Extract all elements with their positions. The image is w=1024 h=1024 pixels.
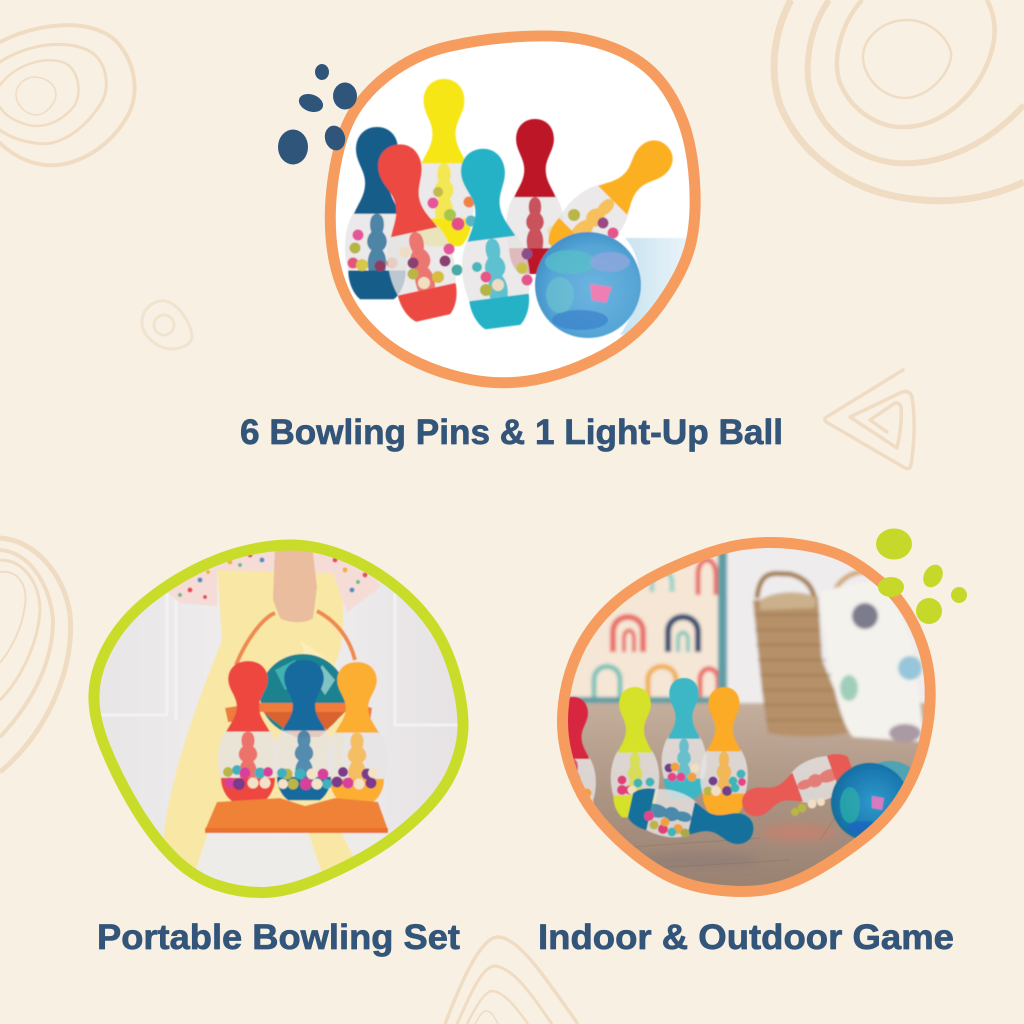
light-up ball: [535, 232, 641, 338]
ball: [260, 654, 346, 736]
coral pin: [377, 144, 463, 322]
decorative contour: left middle: [0, 538, 71, 772]
decorative contour: triangle: [825, 370, 914, 469]
handle: [236, 611, 355, 665]
basket: [753, 592, 852, 736]
floor reflections: [640, 825, 836, 868]
heading: indoor outdoor: Indoor & Outdoor Game: [538, 918, 954, 957]
fallen blue pin: [627, 788, 754, 845]
orange pin: [327, 662, 387, 802]
photo 2: portable bowling set: [90, 540, 470, 900]
ball: [830, 760, 910, 838]
orange pin: [548, 140, 674, 247]
decorative contour: small circle: [142, 301, 192, 349]
rainbows: [594, 560, 718, 697]
upper tray: [225, 703, 372, 737]
wall: [724, 553, 862, 703]
fallen coral pin: [742, 754, 852, 817]
floral blouse: [165, 548, 380, 612]
blue pin: [274, 660, 334, 800]
motion trail: [620, 238, 686, 336]
trousers: [163, 565, 355, 877]
red pin: [568, 696, 596, 803]
teal frame: [555, 550, 727, 705]
carrier tray: [205, 798, 388, 833]
decorative contour: top right: [774, 0, 1024, 201]
wallpaper: [570, 555, 720, 700]
photo 3: indoor and outdoor game: [550, 540, 942, 898]
yellow pin: [413, 79, 476, 246]
red pin: [218, 661, 278, 801]
lime pin: [611, 687, 659, 817]
decorative contour: bottom: [445, 937, 578, 1024]
heading: pins and ball: 6 Bowling Pins & 1 Light-Up Ball: [240, 413, 783, 452]
beads: [223, 765, 378, 790]
decorative contour: top left: [0, 25, 135, 165]
icon: green blobs: [876, 528, 967, 624]
teal pin: [662, 678, 706, 799]
arm: [273, 545, 317, 622]
blanket: [832, 585, 924, 744]
blue pin: [345, 127, 409, 299]
orange pin: [700, 687, 748, 815]
floor: [575, 700, 924, 886]
teal pin: [460, 148, 534, 330]
icon: blue blobs: [278, 64, 357, 164]
basket handles: [832, 569, 864, 590]
photo 1: bowling pins and light-up ball: [330, 36, 700, 383]
heading: portable: Portable Bowling Set: [97, 918, 460, 957]
dark red pin: [506, 119, 564, 274]
